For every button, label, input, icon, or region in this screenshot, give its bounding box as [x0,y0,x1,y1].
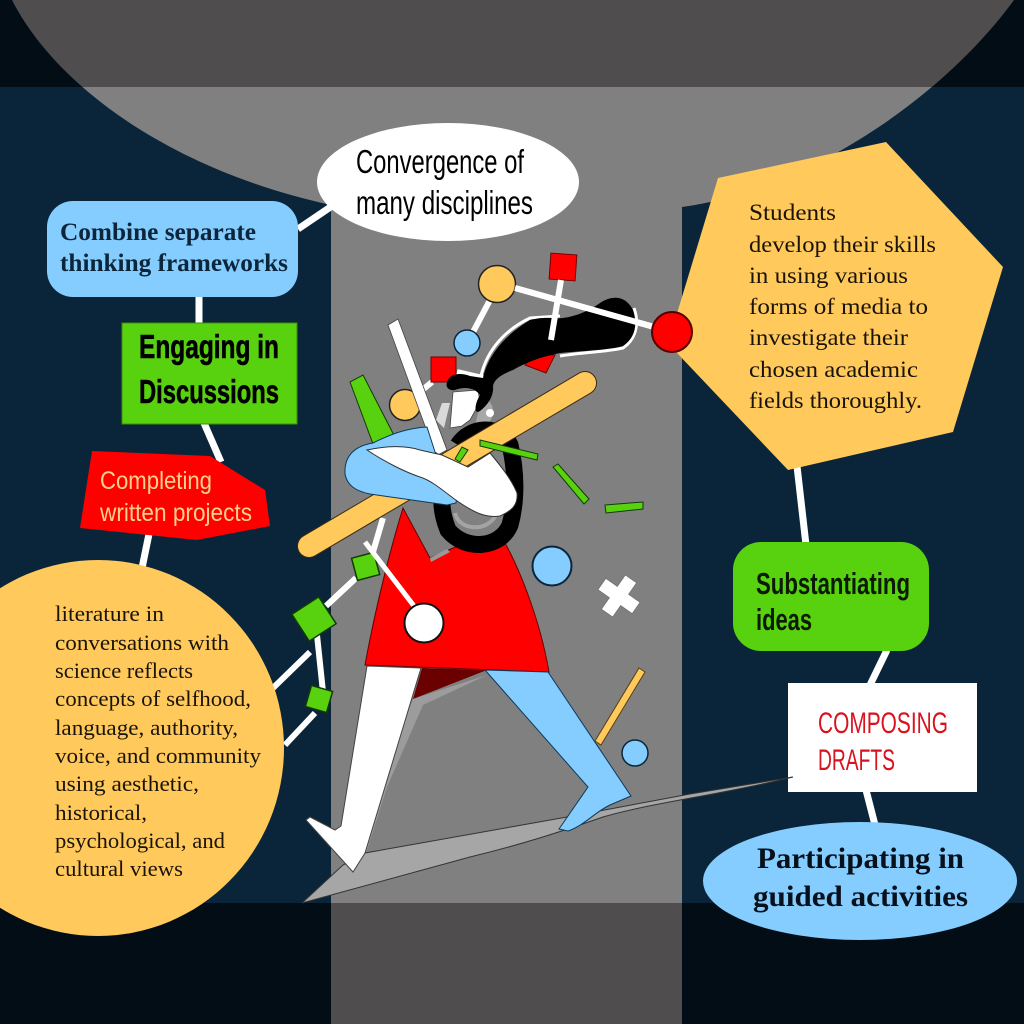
figure: neck notch shade [430,549,450,562]
callout: convergence: many disciplines [356,184,533,221]
callout: engaging in discussions: Engaging in [139,328,279,365]
callout: composing drafts [788,683,977,792]
node: red squares and tip [431,253,577,382]
accent: blue circle [532,546,572,586]
panel: literature circle: language, authority, [55,715,238,740]
figure: flowing hair [447,298,635,412]
line over hair [515,280,672,340]
figure: hair ring [442,430,515,544]
figure: green bar [350,375,400,452]
callout: combine frameworks: thinking frameworks [60,250,288,277]
callout: participating in guided activities: guided activities [753,880,968,913]
panel: students hexagon: fields thoroughly. [749,388,922,413]
figure: hair halo [481,308,637,376]
panel: literature circle: science reflects [55,658,193,683]
callout: completing written projects: Completing [100,467,212,495]
callout: combine frameworks: Combine separate [60,219,256,246]
callout: substantiating ideas: ideas [756,602,812,637]
panel: literature circle: psychological, and [55,828,225,853]
callout: participating in guided activities [703,822,1017,940]
callout: convergence: Convergence of [356,143,525,180]
figure: yellow rod [309,383,585,546]
panel: literature circle: cultural views [55,856,183,881]
accents: green bars [455,440,643,513]
callout: substantiating ideas: Substantiating [756,566,910,601]
callout: engaging in discussions: Discussions [139,373,279,410]
callout: participating in guided activities: Participating in [757,842,964,875]
figure: leg shadow [357,675,487,853]
callout: convergence [317,123,579,241]
panel: literature circle: voice, and community [55,743,261,768]
ramp [302,777,793,903]
panel: students hexagon [672,142,1003,470]
panel: students hexagon: Students [749,200,836,225]
panel: students hexagon: develop their skills [749,232,936,257]
connector lines [142,206,887,825]
panel: students hexagon: investigate their [749,325,908,350]
node: green squares [292,552,380,713]
callout: completing written projects: written projects [99,499,252,527]
callout: composing drafts: DRAFTS [818,744,895,777]
accent: small blue circle [622,740,648,766]
node: red circle [652,312,692,352]
callout: combine frameworks [47,201,298,297]
node: yellow circle [478,266,516,302]
panel: literature circle: conversations with [55,630,229,655]
white line on dress [365,542,414,606]
panel: students hexagon: in using various [749,263,908,288]
callout: engaging in discussions [122,323,297,424]
panel: literature circle: using aesthetic, [55,771,199,796]
figure: blue arm [345,427,460,505]
callout: composing drafts: COMPOSING [818,707,948,740]
node: white circle on dress [404,604,444,642]
figure: yellow rod fill [309,383,585,546]
figure: white bar [388,319,447,456]
panel: students hexagon: chosen academic [749,357,918,382]
node: blue circle top [454,330,480,356]
figure: dark under dress [413,668,487,699]
figure: blue leg and foot [485,670,631,831]
figure: head [436,390,494,430]
node: yellow circle behind [390,390,420,420]
panel: literature circle [0,560,284,936]
panel: literature circle: literature in [55,601,164,626]
callout: substantiating ideas [733,542,929,651]
figure: white leg and foot [306,666,421,872]
callout: completing written projects [80,451,270,540]
node network lines [272,288,672,745]
panel: students hexagon: forms of media to [749,294,928,319]
figure: ring inner shade [455,513,497,527]
figure: dress [365,508,549,672]
figure: white arm [367,447,517,516]
accent: yellow stick [595,668,645,745]
accent: white cross [590,567,648,625]
panel: literature circle: concepts of selfhood, [55,686,251,711]
panel: literature circle: historical, [55,800,147,825]
